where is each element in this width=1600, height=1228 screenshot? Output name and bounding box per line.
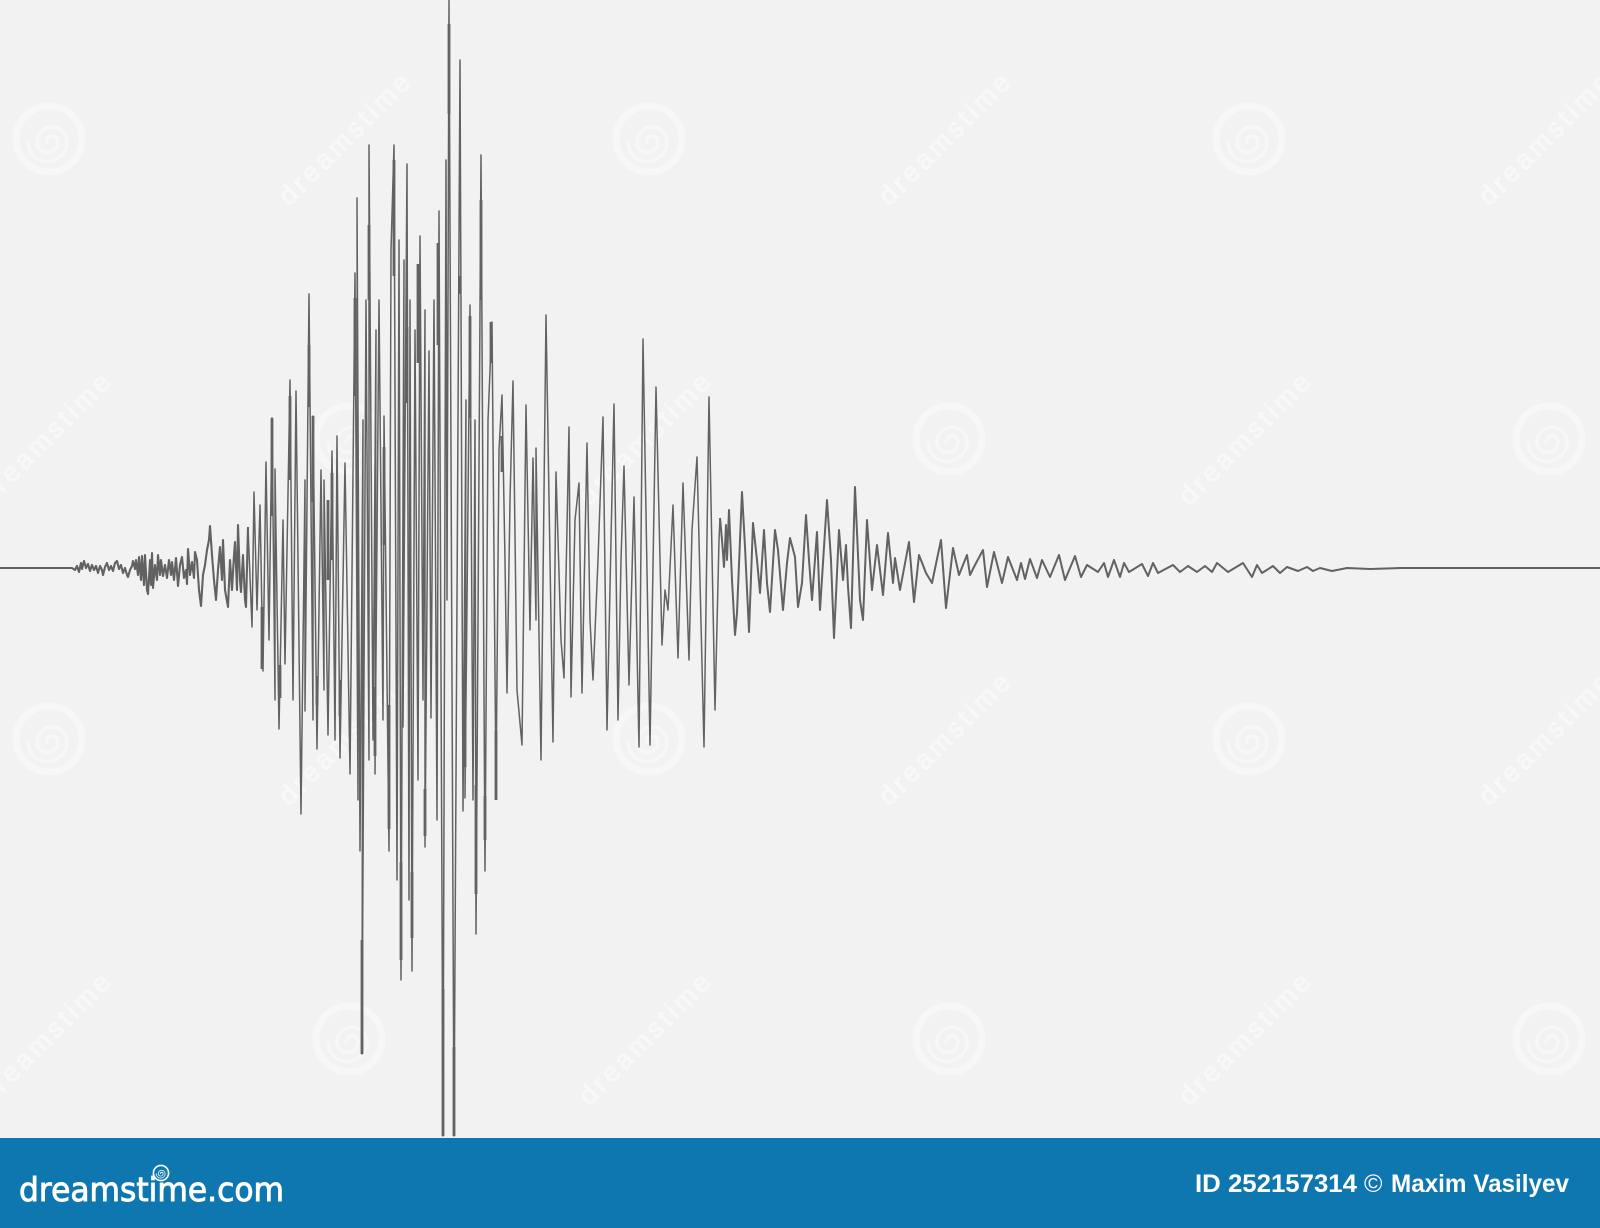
footer logo spiral icon xyxy=(153,1165,169,1181)
watermark: repeated diagonal dreamstime text: dreamstime xyxy=(1172,964,1319,1111)
waveform: thick noisy spike segments xyxy=(262,24,502,1136)
watermark: repeated diagonal dreamstime text: dreamstime xyxy=(272,664,419,811)
footer image id and author credit: ID 252157314 xyxy=(1195,1170,1357,1198)
waveform: decaying coda xyxy=(720,487,1600,638)
watermark: repeated diagonal dreamstime text: dreamstime xyxy=(872,664,1019,811)
watermark: repeated diagonal dreamstime text: dreamstime xyxy=(572,964,719,1111)
waveform: low-amplitude onset xyxy=(0,525,248,607)
footer image id and author credit: © xyxy=(1364,1170,1383,1198)
watermark: repeated diagonal dreamstime text: dreamstime xyxy=(272,64,419,211)
watermark: repeated diagonal dreamstime text: dreamstime xyxy=(572,364,719,511)
watermark: repeated diagonal dreamstime text: dreamstime xyxy=(872,64,1019,211)
watermark: repeated spiral logos xyxy=(16,106,1582,1072)
footer logo wordmark: dreamstime.com xyxy=(19,1170,284,1209)
footer image id and author credit xyxy=(1195,1170,1569,1198)
watermark: repeated diagonal dreamstime text: dreamstime xyxy=(1172,364,1319,511)
footer band xyxy=(0,1138,1600,1228)
footer image id and author credit: Maxim Vasilyev xyxy=(1391,1170,1569,1198)
waveform: main high-amplitude burst xyxy=(248,0,720,1136)
